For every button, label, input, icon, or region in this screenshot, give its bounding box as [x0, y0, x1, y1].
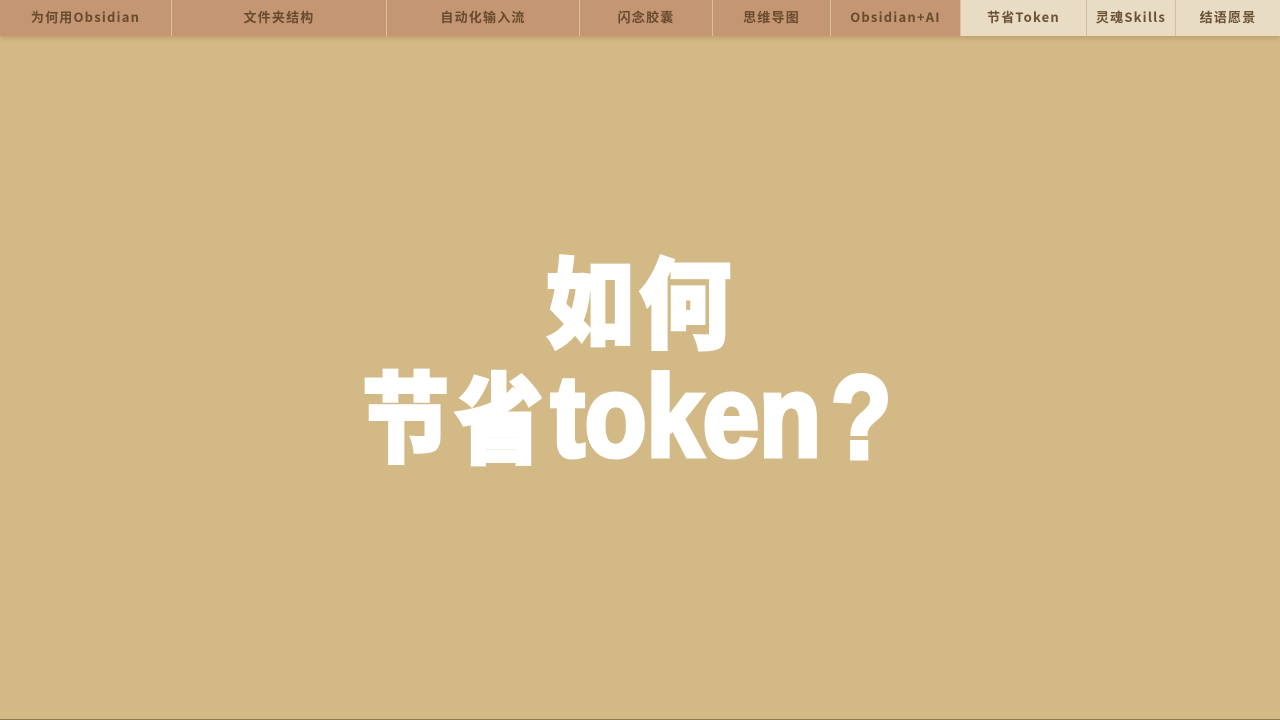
- tab: 为何用Obsidian: 为何用Obsidian: [31, 7, 140, 26]
- tab: 为何用Obsidian: [0, 0, 172, 36]
- tab: 结语愿景: 结语愿景: [1200, 7, 1256, 26]
- title: token: [551, 353, 821, 481]
- tab: 节省Token (active): [961, 0, 1087, 36]
- tab: 思维导图: [713, 0, 831, 36]
- title: 如: [546, 226, 634, 368]
- tab: 闪念胶囊: [580, 0, 713, 36]
- tab: 灵魂Skills: 灵魂Skills: [1096, 7, 1166, 26]
- bottom edge line: [0, 719, 1280, 720]
- navigation bar: [0, 0, 1280, 36]
- title: 何: [639, 227, 731, 369]
- tab: Obsidian+AI: [831, 0, 961, 36]
- tab: 闪念胶囊: 闪念胶囊: [618, 7, 674, 26]
- tab: 自动化输入流: 自动化输入流: [440, 7, 526, 26]
- tab: 灵魂Skills: [1087, 0, 1176, 36]
- tab: Obsidian+AI: Obsidian+AI: [850, 7, 941, 26]
- tab: 自动化输入流: [387, 0, 580, 36]
- tab: 结语愿景: [1176, 0, 1280, 36]
- tab: 文件夹结构: [172, 0, 387, 36]
- tab: 节省Token (active): 节省Token: [987, 7, 1060, 26]
- title: 省: [455, 342, 543, 484]
- title: ?: [831, 352, 892, 484]
- tab: 文件夹结构: 文件夹结构: [243, 7, 314, 26]
- title: 节: [362, 341, 449, 483]
- tab: 思维导图: 思维导图: [743, 7, 800, 26]
